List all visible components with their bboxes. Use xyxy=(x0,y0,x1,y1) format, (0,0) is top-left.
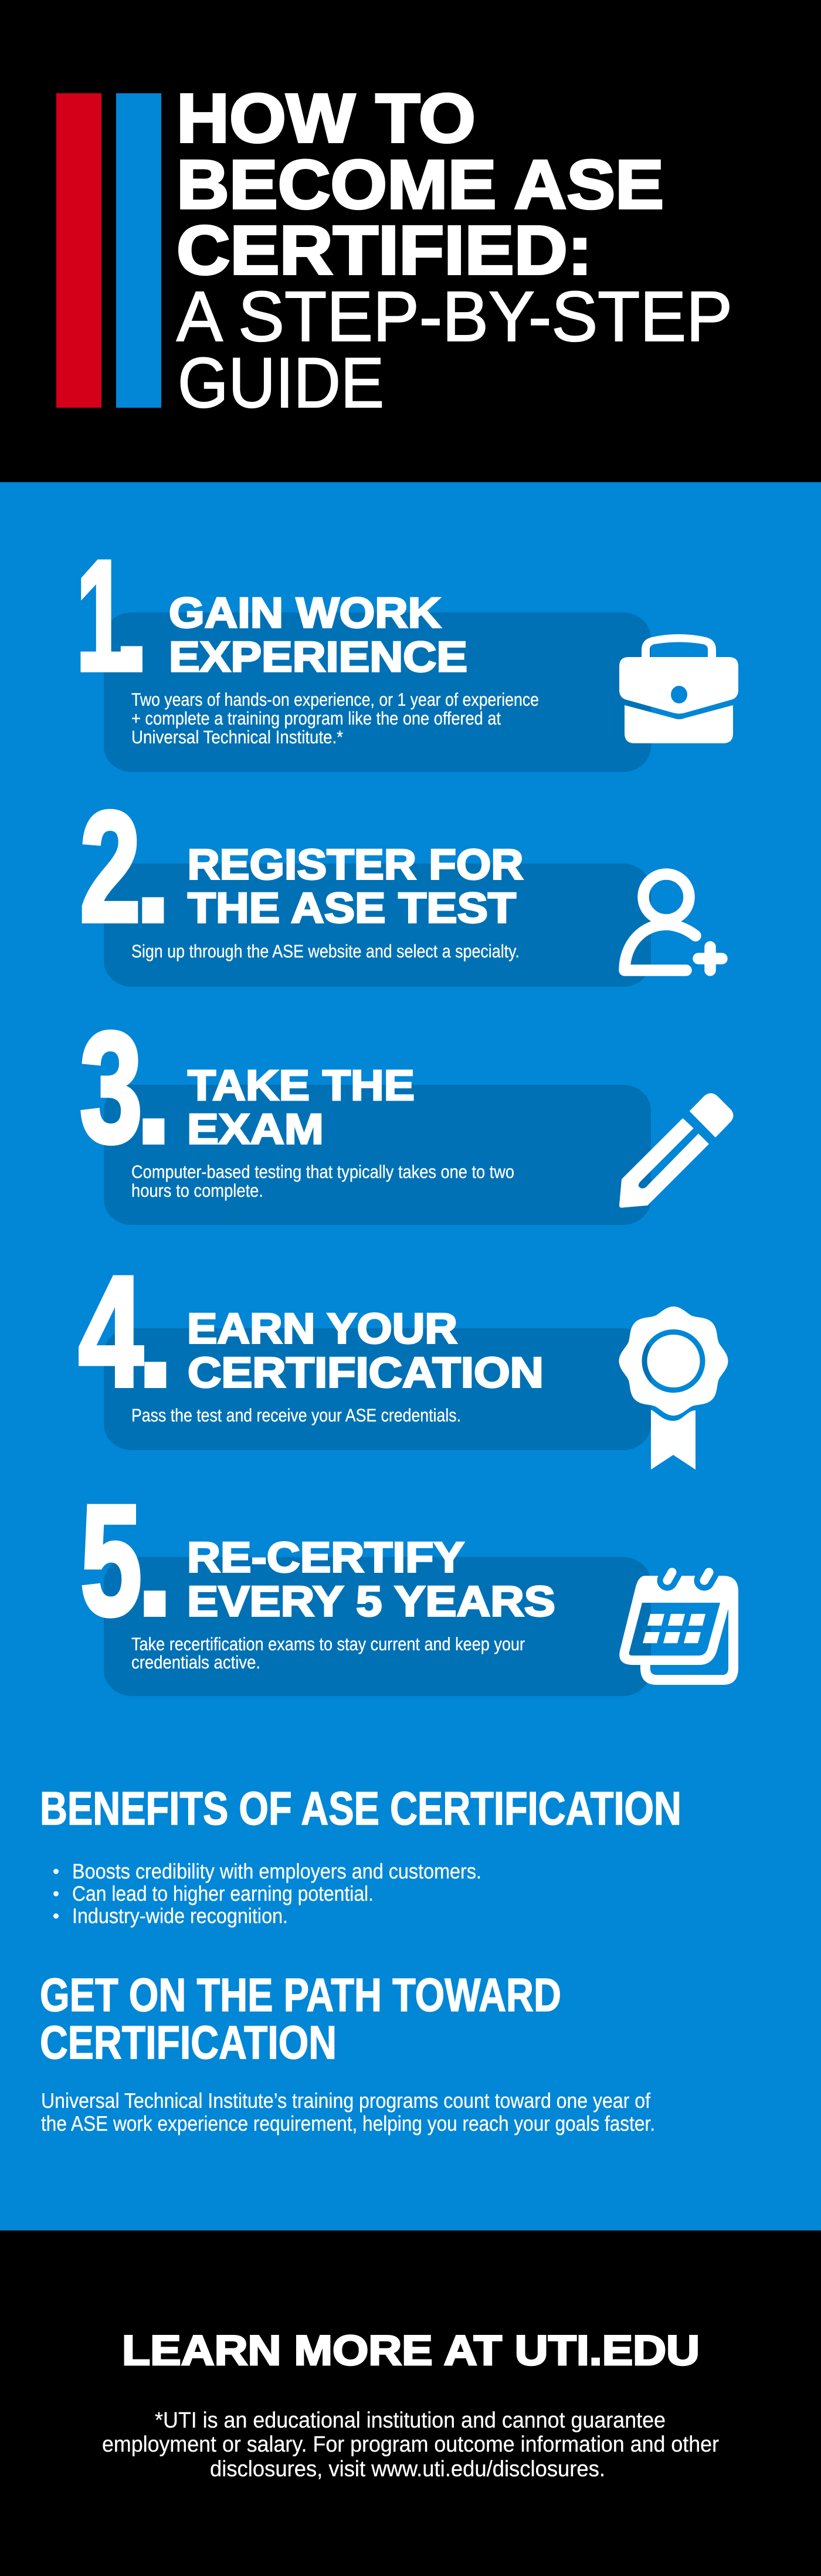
step 3 description xyxy=(131,1162,514,1201)
step number 5: 5 xyxy=(80,1472,142,1648)
step 3 heading: TAKE THE xyxy=(188,1062,415,1109)
icon: calendar xyxy=(619,1572,738,1685)
panel: header background xyxy=(0,0,821,482)
title: BECOME ASE xyxy=(177,146,664,224)
icon: pencil xyxy=(619,1094,733,1208)
title xyxy=(177,80,732,422)
benefits list: Can lead to higher earning potential. xyxy=(72,1881,374,1905)
card xyxy=(104,864,651,987)
blue accent bar xyxy=(116,93,161,408)
step number 5: . xyxy=(134,1457,176,1654)
title: GUIDE xyxy=(178,343,384,422)
card xyxy=(104,612,651,772)
benefits list: Industry-wide recognition. xyxy=(72,1904,288,1928)
step 5 description: Take recertification exams to stay current and keep your xyxy=(131,1634,525,1654)
step number 1: . xyxy=(110,513,153,710)
step 5 heading: RE-CERTIFY xyxy=(187,1534,464,1582)
benefits list: Boosts credibility with employers and customers. xyxy=(72,1859,481,1883)
step 1 heading: GAIN WORK xyxy=(169,589,441,637)
step number 4: 4 xyxy=(79,1243,144,1419)
step number 2: 2 xyxy=(80,778,141,954)
step 3 description: Computer-based testing that typically takes one to two xyxy=(131,1162,514,1182)
step 3 heading xyxy=(187,1062,415,1153)
step 1 heading xyxy=(169,589,467,681)
step 2 description: Sign up through the ASE website and select a specialty. xyxy=(131,941,520,962)
step number 2: . xyxy=(131,764,175,961)
path paragraph: the ASE work experience requirement, helping you reach your goals faster. xyxy=(41,2111,655,2135)
path heading xyxy=(40,1969,561,2069)
step 1 description: + complete a training program like the one offered at xyxy=(131,708,501,729)
step 4 heading: EARN YOUR xyxy=(187,1305,457,1353)
benefits heading: BENEFITS OF ASE CERTIFICATION xyxy=(40,1782,681,1834)
panel: step 4 xyxy=(79,1275,728,1470)
step 4 description: Pass the test and receive your ASE credentials. xyxy=(131,1405,461,1426)
benefits list xyxy=(53,1859,481,1928)
icon: briefcase xyxy=(619,634,738,743)
step number 3: . xyxy=(133,985,175,1182)
path heading: GET ON THE PATH TOWARD xyxy=(40,1969,561,2021)
panel: benefits xyxy=(40,1782,681,1928)
step number 3: 3 xyxy=(80,999,143,1175)
step 2 heading: THE ASE TEST xyxy=(188,885,516,932)
title: A STEP-BY-STEP xyxy=(177,276,732,356)
icon: person with plus xyxy=(625,874,722,970)
path paragraph xyxy=(41,2088,655,2135)
disclaimer: *UTI is an educational institution and cannot guarantee xyxy=(155,2408,666,2433)
disclaimer: employment or salary. For program outcome information and other xyxy=(102,2432,719,2457)
step 1 description: Universal Technical Institute.* xyxy=(131,727,343,747)
icon: award ribbon xyxy=(619,1306,728,1470)
step 5 description: credentials active. xyxy=(131,1652,260,1673)
disclaimer: disclosures, visit www.uti.edu/disclosures. xyxy=(210,2457,605,2482)
step number 1: 1 xyxy=(76,527,127,703)
card xyxy=(104,1557,651,1696)
step 4 heading: CERTIFICATION xyxy=(188,1349,544,1396)
call to action: LEARN MORE AT UTI.EDU xyxy=(122,2327,700,2374)
path paragraph: Universal Technical Institute’s training programs count toward one year of xyxy=(41,2088,651,2113)
panel: step 1 xyxy=(76,513,738,772)
title: CERTIFIED: xyxy=(177,212,592,289)
panel: footer xyxy=(102,2327,719,2482)
step 3 description: hours to complete. xyxy=(131,1180,263,1201)
card xyxy=(104,1328,651,1450)
step 2 heading xyxy=(188,841,523,932)
panel: step 5 xyxy=(82,1504,738,1696)
title: HOW TO xyxy=(177,80,476,157)
path heading: CERTIFICATION xyxy=(40,2016,337,2069)
step 2 heading: REGISTER FOR xyxy=(188,841,523,888)
panel: step 3 xyxy=(80,985,733,1225)
panel: step 2 xyxy=(80,764,722,987)
panel: get on the path xyxy=(40,1969,655,2135)
step 1 description xyxy=(131,689,539,747)
panel: steps background xyxy=(0,482,821,2230)
panel: footer background xyxy=(0,2230,821,2576)
step 4 heading xyxy=(187,1305,544,1396)
step 1 heading: EXPERIENCE xyxy=(169,634,467,681)
step 1 description: Two years of hands-on experience, or 1 year of experience xyxy=(131,689,539,710)
header xyxy=(56,80,732,422)
step 5 heading xyxy=(187,1534,555,1625)
step number 4: . xyxy=(134,1228,177,1426)
disclaimer xyxy=(102,2408,719,2482)
step 3 heading: EXAM xyxy=(187,1105,324,1153)
card xyxy=(104,1085,651,1225)
red accent bar xyxy=(56,93,101,408)
step 5 heading: EVERY 5 YEARS xyxy=(187,1578,555,1625)
step 5 description xyxy=(131,1634,525,1673)
